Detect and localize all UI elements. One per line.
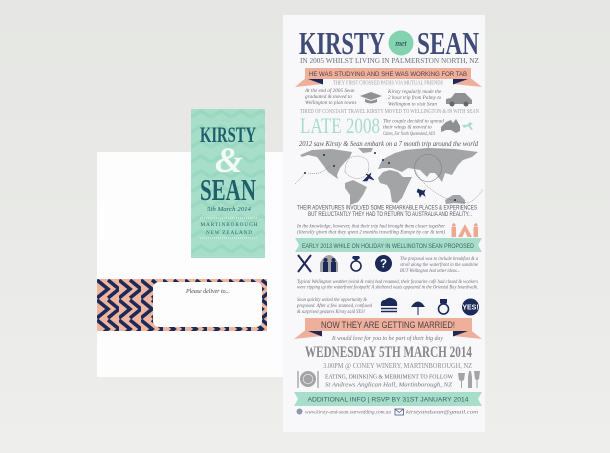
text: end of 2005 — [304, 87, 357, 106]
icon: glasses and bottle — [458, 371, 480, 388]
invitation line: It would love for you to be part of their big day — [331, 335, 443, 342]
pink ribbon: studying: HE WAS STUDYING AND SHE WAS WORKING FOR TAB — [309, 71, 468, 78]
eating details: EATING, DRINKING & MERRIMENT TO FOLLOW — [325, 374, 453, 380]
icon: people and tent — [452, 223, 478, 237]
card ampersand: & — [215, 140, 243, 180]
text: end of 2005: At the end of 2005 Sean — [304, 87, 355, 94]
icon: plate and cutlery — [298, 371, 318, 388]
title — [299, 25, 479, 61]
text: Cairns: their wings & moved to — [383, 124, 432, 130]
envelope — [97, 152, 283, 377]
icon: cloud and waves — [381, 298, 397, 306]
text: proposal plan — [400, 255, 479, 274]
text: Kirsty trips — [387, 89, 442, 108]
date heading: WEDNESDAY 5TH MARCH 2014 — [305, 344, 472, 361]
knowledge text — [296, 224, 446, 236]
text: proposal plan: The proposal was to include breakfast & a — [400, 255, 478, 262]
text: seized opportunity — [296, 297, 372, 315]
icon: plane two — [417, 189, 425, 197]
continents — [300, 149, 352, 179]
text: seized opportunity: & surprised gestures Kirsty said YES! — [297, 309, 365, 315]
mint ribbon: proposed: EARLY 2013 WHILE ON HOLIDAY IN WELLINGTON SEAN PROPOSED — [302, 243, 474, 250]
card date: 5th March 2014 — [207, 206, 252, 213]
card location — [200, 218, 258, 238]
text: seized opportunity: proposed. After a few stunned, confused — [296, 302, 372, 309]
title: KIRSTY — [299, 25, 385, 61]
text: Cairns — [383, 118, 444, 137]
icon: yes badge: YES! — [462, 304, 479, 312]
card name Sean: SEAN — [200, 172, 256, 207]
icon: plane one — [363, 173, 374, 181]
icon: Australia map — [441, 119, 460, 133]
mint ribbon: additional info: ADDITIONAL INFO | RSVP BY 31ST JANUARY 2014 — [308, 396, 469, 404]
text: weather: Typical Wellington weather (wind & rain) had resumed, their favourite café had closed & workers — [297, 278, 478, 285]
subtitle: IN 2005 WHILST LIVING IN PALMERSTON NORTH, NZ — [300, 57, 479, 65]
text: proposal plan: stroll along the waterfront in the sunshine — [400, 261, 479, 268]
mint ribbon: additional info — [294, 392, 482, 406]
text: Kirsty trips: Wellington to visit Sean — [388, 102, 437, 108]
icon: question: ? — [380, 258, 387, 270]
adventures text — [297, 206, 477, 218]
envelope address band — [97, 279, 267, 331]
text: Cairns: The couple decided to spread — [383, 118, 444, 124]
late 2008 heading: LATE 2008 — [300, 113, 380, 138]
email contact — [395, 409, 479, 416]
card location: MARTINBOROUGH — [200, 222, 258, 228]
text: Kirsty trips: Kirsty regularly made the — [387, 89, 442, 95]
title: SEAN — [417, 25, 479, 61]
pink ribbon: getting married — [294, 318, 482, 339]
time and venue: 3.00PM @ CONEY WINERY, MARTINBOROUGH, NZ — [323, 361, 472, 370]
route circle — [414, 154, 442, 182]
icon: graduation cap — [360, 92, 382, 104]
handwritten trip line: 2012 saw Kirsty & Sean embark on a 7 month trip around the world — [299, 139, 478, 148]
text: Kirsty trips: 2 hour trip from Palmy to — [388, 94, 442, 101]
text: Cairns: Cairns, Far North Queensland, AUS — [383, 131, 435, 137]
website contact: www.kirsty-and-sean.ourwedding.com.au — [305, 410, 392, 416]
mint save-the-date card — [191, 109, 265, 258]
world map — [295, 148, 483, 205]
crossed paths caption: THEY FIRST CROSSED PATHS VIA MUTUAL FRIENDS — [333, 80, 443, 86]
adventures text: BUT RELUCTANTLY THEY HAD TO RETURN TO AUSTRALIA AND REALITY... — [308, 212, 472, 218]
text: end of 2005: graduated & moved to — [305, 94, 352, 100]
icon: umbrella — [411, 302, 425, 315]
pink ribbon: getting married: NOW THEY ARE GETTING MARRIED! — [321, 320, 455, 330]
band label: Please deliver to... — [185, 289, 230, 295]
card name Kirsty: KIRSTY — [200, 122, 256, 147]
knowledge text: In the knowledge, however, that their trip had brought them closer together — [296, 224, 446, 230]
icon: couple — [320, 255, 338, 272]
icon: knife and fork — [298, 255, 311, 272]
card location: NEW ZEALAND — [206, 230, 252, 236]
icon: ring — [351, 256, 361, 271]
city dots — [304, 152, 456, 201]
icon equation: proposal — [298, 255, 392, 272]
icon: small plane — [462, 122, 473, 130]
email contact: kirstyandsean@gmail.com — [406, 410, 479, 416]
adventures text: THEIR ADVENTURES INVOLVED SOME REMARKABLE PLACES & EXPERIENCES — [297, 206, 477, 212]
icon: ring two — [438, 299, 448, 314]
text: weather: were ripping up the waterfront footpath! A sheltered oasis appeared in the Oriental Bay boardwalk. — [297, 284, 478, 290]
flight paths — [295, 156, 483, 203]
text: seized opportunity: Sean quickly seized the opportunity & — [297, 297, 368, 303]
website contact — [296, 408, 392, 416]
eating details: St Andrews Anglican Hall, Martinborough, NZ — [325, 382, 452, 388]
text: end of 2005: Wellington to plan towns — [305, 100, 357, 106]
icon: car — [446, 93, 472, 106]
title: met — [395, 39, 408, 48]
text: weather — [297, 278, 478, 290]
mint ribbon: proposed — [295, 238, 482, 252]
constant travel caption: TIRED OF CONSTANT TRAVEL KIRSTY MOVED TO WELLINGTON & IN WITH SEAN — [300, 109, 480, 115]
invitation paper — [283, 15, 485, 432]
knowledge text: (literally given that they spent 2 months travelling Europe by car & tent) — [297, 228, 445, 236]
eating details — [325, 374, 453, 388]
pink ribbon: studying — [295, 68, 482, 87]
text: proposal plan: BUT Wellington had other ideas... — [400, 268, 460, 274]
icon equation: yes — [381, 298, 479, 316]
